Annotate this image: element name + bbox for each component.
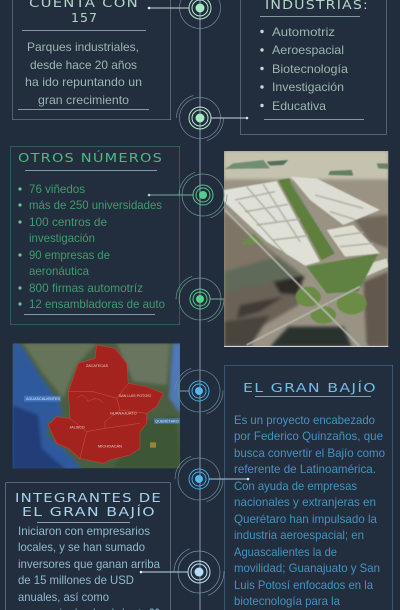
node: mint top	[148, 0, 220, 28]
text: integrantes: de 15 millones de USD	[18, 573, 134, 587]
list: otros numeros	[18, 182, 165, 311]
list: otros numeros: aeronáutica	[29, 264, 89, 278]
node: green one	[148, 171, 227, 219]
map labels: JALISCO	[69, 425, 85, 429]
list: otros numeros: más de 250 universidades	[29, 198, 162, 212]
node: blue two	[175, 455, 249, 503]
text: descripcion del proyecto: busca convertir el Bajío como	[234, 446, 385, 460]
list: otros numeros: 90 empresas de	[29, 248, 110, 262]
map labels: MICHOACÁN	[98, 445, 122, 449]
text: descripcion del proyecto: movilidad; Guanajuato y San	[234, 561, 380, 575]
map labels: ZACATECAS	[86, 364, 109, 368]
text: integrantes: Iniciaron con empresarios	[18, 524, 150, 538]
text: parques industriales: gran crecimiento	[38, 93, 129, 107]
text: descripcion del proyecto: Luis Potosí enfocados en la	[234, 578, 373, 592]
heading: integrantes	[15, 491, 162, 519]
text: descripcion del proyecto: Es un proyecto encabezado	[234, 413, 375, 427]
map labels: SAN LUIS POTOSÍ	[119, 394, 152, 398]
text: descripcion del proyecto: Querétaro han impulsado la	[234, 512, 377, 526]
panel: cuenta con 157	[12, 0, 171, 120]
text: parques industriales: desde hace 20 años	[30, 58, 137, 72]
list: otros numeros: 100 centros de	[29, 215, 107, 229]
list: industrias: Aeroespacial	[272, 43, 344, 57]
list: industrias	[260, 25, 348, 113]
list: otros numeros: 12 ensambladoras de auto	[29, 297, 165, 311]
node: mint second	[176, 94, 248, 142]
panel: el gran bajio	[224, 365, 393, 610]
text: descripcion del proyecto: referente de Latinoamérica.	[234, 462, 376, 476]
text: descripcion del proyecto: nacionales y extranjeras en	[234, 495, 376, 509]
map labels: AGUASCALIENTES	[26, 397, 61, 401]
text: integrantes	[18, 524, 160, 610]
heading: cuenta con 157	[29, 0, 139, 25]
text: parques industriales: ha ido repuntando un	[25, 75, 142, 89]
list: industrias: Automotriz	[272, 25, 335, 39]
text: descripcion del proyecto: Aguascalientes la de	[234, 545, 337, 559]
timeline line	[199, 0, 201, 610]
list: otros numeros: investigación	[29, 231, 95, 245]
text: parques industriales: Parques industriales,	[27, 40, 139, 54]
list: otros numeros: 76 viñedos	[29, 182, 85, 196]
panel: industrias	[240, 0, 386, 135]
text: descripcion del proyecto: industria aeroespacial; en	[234, 528, 364, 542]
heading: otros numeros: OTROS NÚMEROS	[18, 150, 163, 165]
map labels: QUERÉTARO	[155, 418, 179, 423]
text: descripcion del proyecto: Con ayuda de empresas	[234, 479, 357, 493]
panel: integrantes	[6, 482, 170, 610]
heading: cuenta con 157: 157	[71, 11, 98, 25]
heading: integrantes: EL GRAN BAJÍO	[22, 504, 156, 519]
list: industrias: Biotecnología	[272, 62, 348, 76]
text: integrantes: locales, y se han sumado	[18, 540, 145, 554]
text: integrantes: inversores que ganan arriba	[18, 557, 160, 571]
map labels: GUANAJUATO	[110, 411, 137, 415]
list: industrias: Educativa	[272, 99, 326, 113]
text: descripcion del proyecto: biotecnología para la	[234, 594, 340, 608]
text: integrantes: anuales, así como	[18, 590, 109, 604]
heading: el gran bajio: EL GRAN BAJÍO	[243, 380, 377, 395]
list: otros numeros: 800 firmas automotríz	[29, 281, 143, 295]
node: light blue	[140, 547, 224, 597]
text: descripcion del proyecto: por Federico Quinzaños, que	[234, 429, 383, 443]
list: industrias: Investigación	[272, 80, 344, 94]
photo: industrial park aerial view	[224, 151, 388, 347]
map labels	[26, 364, 179, 449]
node: green two	[176, 275, 224, 323]
map: gran bajio region	[10, 343, 182, 470]
panel: otros numeros	[10, 146, 180, 325]
text: descripcion del proyecto	[234, 413, 385, 608]
node: blue one	[175, 367, 223, 415]
text: parques industriales	[25, 40, 142, 107]
heading: integrantes: INTEGRANTES DE	[15, 491, 162, 505]
